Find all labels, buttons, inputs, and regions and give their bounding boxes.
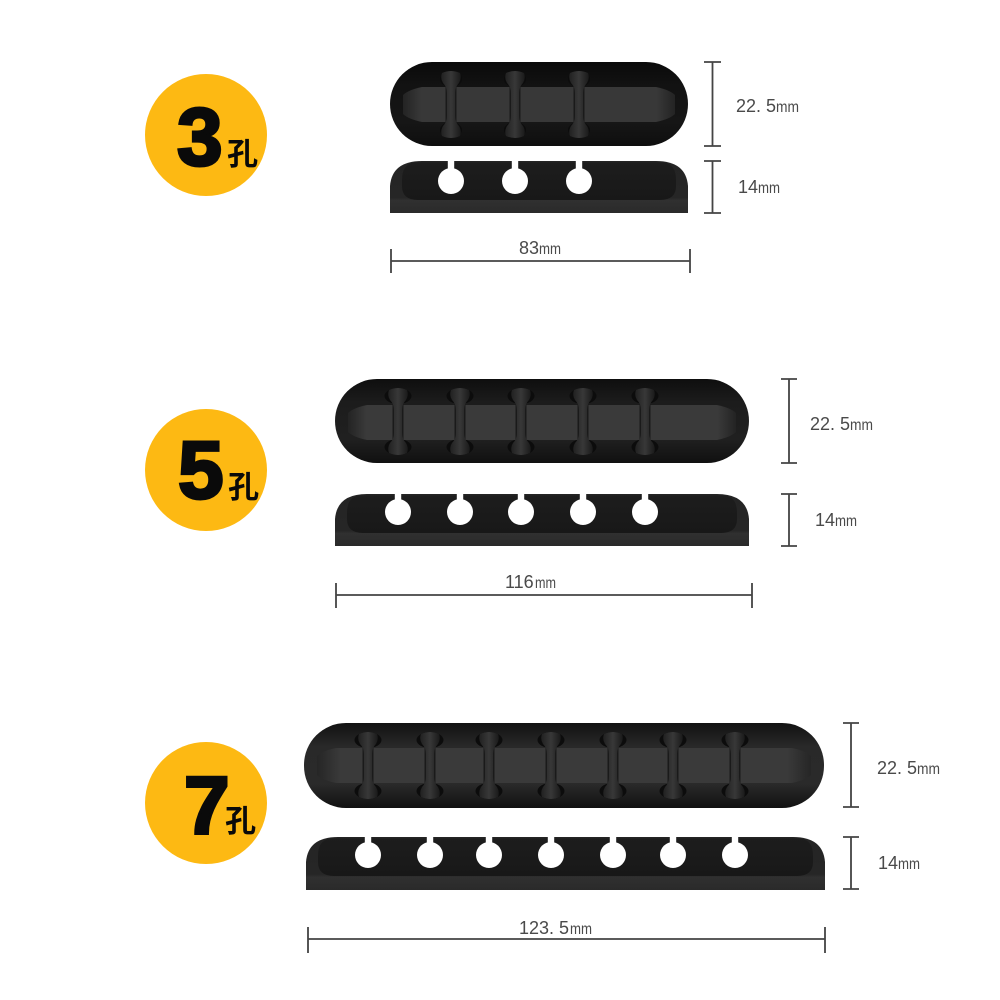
dimension: width 83mm: mm [539,241,561,258]
clip side view: 7 holes [306,833,825,890]
dimension: depth 14mm [781,494,857,546]
dimension: width 116mm: mm [535,575,556,592]
badge: 5 holes: 5 [178,425,224,516]
dimension: depth 14mm: mm [758,180,780,197]
clip side view: 5 holes [335,490,749,546]
badge: 3 holes: 孔 [227,137,258,172]
dimension: depth 14mm: 14 [878,853,898,873]
dimension: height 22.5mm [781,379,873,463]
dimension: height 22.5mm [843,723,940,807]
dimension: width 116mm: 116 [505,572,534,592]
dimension: width 123.5mm: 123. 5 [519,918,569,938]
badge: 7 holes: 孔 [225,804,256,839]
badge: 3 holes: 3 [177,92,223,183]
clip side view: 3 holes [390,159,688,213]
dimension: height 22.5mm: 22. 5 [810,414,850,434]
dimension: height 22.5mm [704,62,799,146]
badge: 5 holes: 孔 [228,470,259,505]
badge: 5 holes [145,409,267,531]
badge: 7 holes: 7 [184,760,230,852]
dimension: width 116mm [336,572,752,608]
dimension: height 22.5mm: mm [850,417,873,434]
badge: 7 holes [145,742,267,864]
dimension: depth 14mm: 14 [815,510,835,530]
dimension: width 83mm: 83 [519,238,539,258]
clip top view: 3 holes [390,62,688,146]
clip top view: 5 holes [335,379,749,463]
dimension: depth 14mm: mm [835,513,857,530]
dimension: depth 14mm [843,837,920,889]
dimension: height 22.5mm: 22. 5 [877,758,917,778]
dimension: height 22.5mm: 22. 5 [736,96,776,116]
dimension: width 83mm [391,238,690,273]
dimension: height 22.5mm: mm [776,99,799,116]
dimension: width 123.5mm: mm [570,921,592,938]
dimension: depth 14mm: 14 [738,177,758,197]
clip top view: 7 holes [304,723,824,808]
dimension: height 22.5mm: mm [917,761,940,778]
dimension: depth 14mm [704,161,780,213]
dimension: width 123.5mm [308,918,825,953]
badge: 3 holes [145,74,267,196]
dimension: depth 14mm: mm [898,856,920,873]
